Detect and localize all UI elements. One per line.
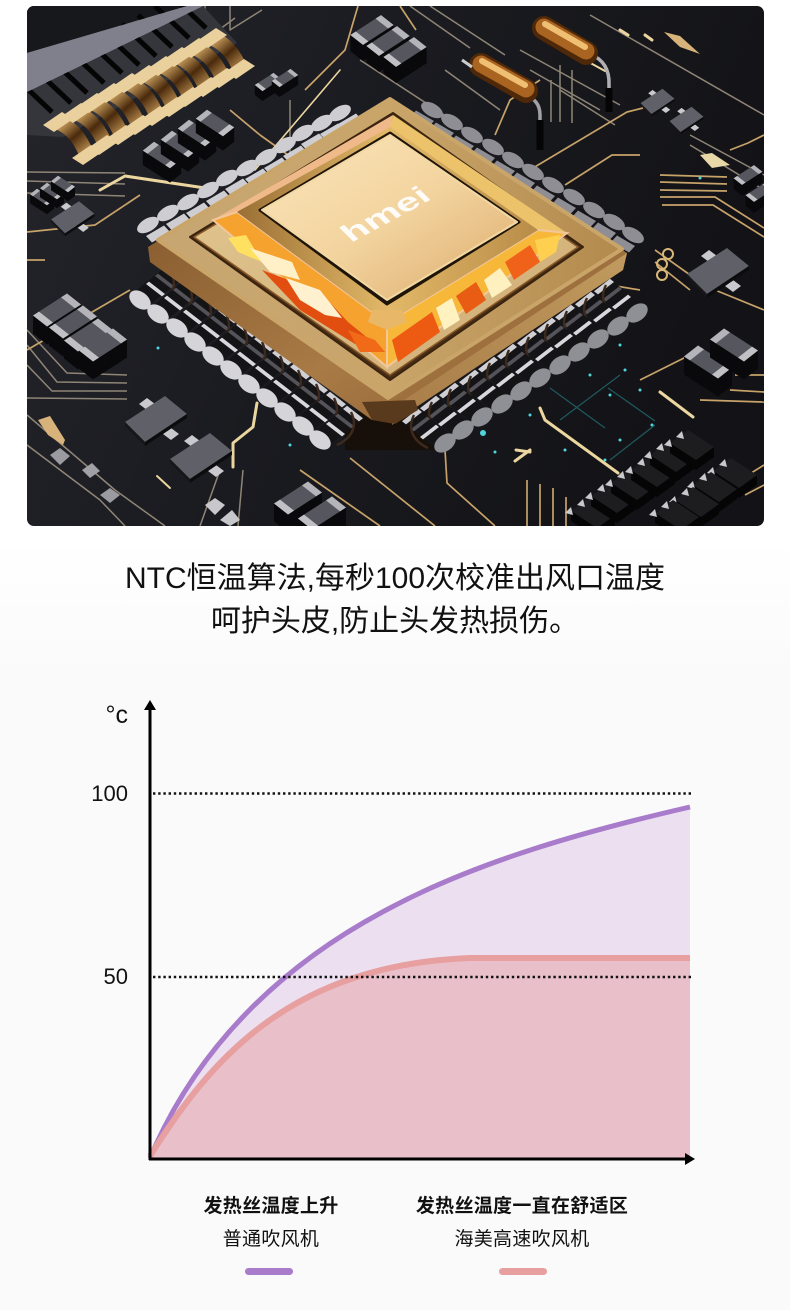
y label 100: 100 — [91, 781, 128, 806]
circuit board image — [18, 0, 774, 548]
x axis with arrow — [149, 1153, 695, 1165]
chip pins front right — [402, 279, 651, 457]
heading line 1: NTC恒温算法,每秒100次校准出风口温度 — [125, 562, 665, 595]
heat ring upper right — [390, 115, 567, 233]
black chips bottom right — [565, 430, 757, 526]
chip pins back left — [134, 101, 362, 242]
y axis unit: °c — [106, 701, 128, 729]
chip body — [148, 99, 627, 425]
area: ordinary dryer — [150, 807, 690, 1159]
legend subtitle right: 海美高速吹风机 — [454, 1229, 590, 1250]
logo text: hmei — [334, 181, 437, 248]
y label 50: 50 — [104, 964, 128, 989]
groove — [190, 113, 583, 380]
heat ring hot patches — [228, 235, 560, 362]
heat ring upper left — [213, 115, 393, 220]
gridline 100 — [153, 792, 691, 795]
board background — [27, 6, 764, 526]
chip pins back right — [410, 98, 647, 252]
gold blotches and pads — [38, 32, 730, 526]
chip shadow foot — [345, 412, 445, 450]
legend title right: 发热丝温度一直在舒适区 — [416, 1196, 628, 1217]
top plate — [262, 135, 517, 300]
teal circuit glints — [156, 176, 702, 462]
area: high-speed dryer — [150, 958, 690, 1159]
inner block sides — [237, 127, 538, 323]
small grey chips — [51, 89, 749, 483]
chip pins front left — [126, 266, 363, 454]
top plate rim — [260, 133, 519, 304]
legend: ordinary dryer — [203, 1196, 339, 1275]
comb connector top left — [18, 0, 255, 165]
heat ring lower right — [387, 230, 567, 367]
legend title left: 发热丝温度上升 — [203, 1196, 339, 1217]
legend subtitle left: 普通吹风机 — [223, 1229, 319, 1250]
legend: high-speed dryer — [416, 1196, 628, 1275]
heading line 2: 呵护头皮,防止头发热损伤。 — [211, 605, 579, 638]
y axis with arrow — [144, 700, 156, 1160]
legend swatch purple — [245, 1268, 293, 1275]
capacitors — [30, 15, 774, 547]
curve: ordinary dryer — [150, 807, 690, 1158]
resistor cylinders — [462, 24, 609, 150]
photo panel: circuit board with gold chip — [27, 6, 764, 526]
gridline 50 — [153, 976, 691, 978]
chip frame top — [158, 99, 622, 398]
silver and gold circuit traces — [27, 6, 764, 526]
plateau — [194, 119, 578, 375]
curve: high-speed dryer — [150, 958, 690, 1156]
chip frame sides — [148, 242, 627, 420]
legend swatch pink — [499, 1268, 547, 1275]
heat ring lower left — [213, 212, 387, 367]
temperature line chart — [91, 700, 695, 1165]
